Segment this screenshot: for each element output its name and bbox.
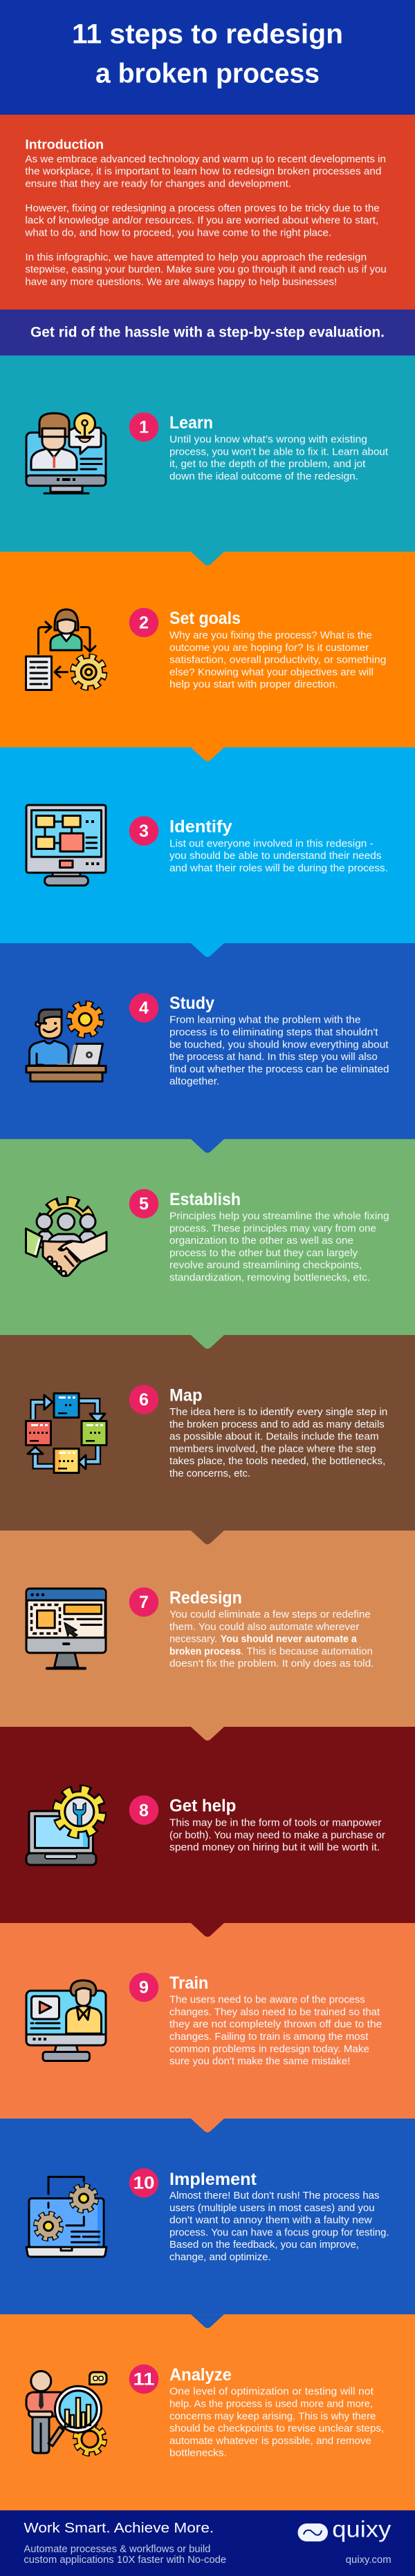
arrow: step 3 to 4: [191, 943, 224, 957]
body text: Set goals: outcome you are hoping for? Is it customer: [169, 642, 369, 654]
icon: person, gear and document cycle: [26, 609, 104, 690]
arrow: step 9 to 10: [191, 2119, 224, 2132]
arrow: step 5 to 6: [191, 1335, 224, 1349]
introduction text: [24, 153, 387, 287]
introduction text: As we embrace advanced technology and warm up to recent developments in: [25, 153, 386, 165]
heading: Redesign: Redesign: [169, 1588, 242, 1607]
number badge 11: 11: [133, 2370, 155, 2389]
number badge 5: [129, 1189, 158, 1218]
panel: step 6 map: [0, 1335, 415, 1531]
panel: step 4 study: [0, 943, 415, 1139]
body text: Study: From learning what the problem with the: [169, 1014, 361, 1026]
number badge 8: 8: [139, 1801, 149, 1820]
body text: Establish: process to the other but they can largely: [169, 1247, 358, 1259]
heading: Set goals: Set goals: [169, 609, 241, 628]
body text: Study: find out whether the process can be eliminated: [169, 1063, 389, 1075]
body text: Train: changes. They also need to be trained so that: [169, 2006, 380, 2018]
body text: Set goals: help you start with proper direction.: [169, 679, 338, 690]
number badge 10: [129, 2168, 158, 2197]
panel: step 3 identify: [0, 748, 415, 943]
panel: step 1 learn: [0, 355, 415, 551]
arrow: step 6 to 7: [191, 1531, 224, 1544]
body text: Get help: This may be in the form of tools or manpower: [169, 1817, 382, 1829]
introduction text: have any more questions. We are always happy to help businesses!: [25, 276, 337, 287]
arrow: step 1 to 2: [191, 551, 224, 565]
body text: Map: as possible about it. Details include the team: [169, 1431, 379, 1443]
number badge 6: [129, 1385, 158, 1414]
body text: Study: process is to eliminating steps that shouldn't: [169, 1027, 378, 1038]
body text: Set goals: satisfaction, overall productivity, or something: [169, 654, 386, 666]
number badge 9: [129, 1973, 158, 2002]
number badge 10: 10: [133, 2174, 155, 2193]
body text: Establish: revolve around streamlining checkpoints,: [169, 1260, 362, 1271]
body text: Redesign: broken process: [169, 1645, 241, 1657]
heading: Map: Map: [169, 1385, 202, 1405]
body text: Set goals: [169, 629, 386, 690]
body text: Analyze: One level of optimization or testing will not: [169, 2386, 374, 2398]
footer description: [24, 2544, 226, 2566]
body text: Analyze: concerns may keep arising. This is why there: [169, 2410, 376, 2422]
icon: cycle of four process cards: [26, 1393, 107, 1473]
body text: Implement: change, and optimize.: [169, 2251, 271, 2263]
icon: laptop with gears and wiring: [26, 2177, 107, 2257]
body text: Map: takes place, the tools needed, the bottlenecks,: [169, 1455, 385, 1467]
banner text: Get rid of the hassle with a step-by-step evaluation.: [30, 323, 385, 340]
icon: person at laptop with gear: [26, 1004, 106, 1081]
panel: title header: [0, 0, 415, 115]
number badge 2: [129, 608, 158, 637]
number badge 11: [129, 2365, 158, 2394]
heading: Identify: Identify: [169, 817, 232, 836]
number badge 4: 4: [139, 998, 149, 1018]
body text: Redesign: You could eliminate a few steps or redefine: [169, 1609, 371, 1620]
body text: Train: sure you don't make the same mistake!: [169, 2056, 350, 2067]
panel: step 8 get help: [0, 1727, 415, 1923]
body text: Analyze: bottlenecks.: [169, 2447, 227, 2459]
body text: Establish: [169, 1211, 389, 1284]
body text: Identify: and what their roles will be during the process.: [169, 862, 388, 874]
body text: Analyze: [169, 2386, 384, 2459]
website: quixy.com: [346, 2555, 391, 2566]
icon: person on monitor with lightbulb: [26, 413, 106, 493]
panel: introduction: [0, 115, 415, 310]
number badge 1: 1: [139, 418, 149, 437]
body text: Establish: process. These principles may vary from one: [169, 1222, 376, 1234]
icon: monitor with design layout and cursor: [26, 1589, 106, 1668]
body text: Train: [169, 1994, 382, 2067]
icon: analyst with magnifier and chart: [26, 2371, 107, 2454]
arrow: step 7 to 8: [191, 1727, 224, 1741]
body text: Set goals: else? Knowing what your objectives are will: [169, 666, 374, 678]
number badge 2: 2: [139, 614, 149, 633]
body text: Implement: [169, 2190, 389, 2263]
introduction text: what to do, and how to proceed, you have come to the right place.: [24, 227, 331, 238]
introduction text: lack of knowledge and/or resources. If you are worried about where to start,: [25, 215, 378, 227]
number badge 3: [129, 816, 158, 846]
heading: Analyze: Analyze: [169, 2365, 232, 2385]
body text: Identify: you should be able to understand their needs: [169, 850, 382, 862]
body text: Learn: Until you know what’s wrong with existing: [169, 434, 367, 445]
body text: Learn: [169, 434, 389, 482]
panel: step 2 set goals: [0, 551, 415, 748]
body text: Get help: spend money on hiring but it will be worth it.: [169, 1841, 380, 1853]
footer description: Automate processes & workflows or build: [24, 2544, 210, 2555]
number badge 7: [129, 1587, 158, 1617]
body text: Train: they are not completely thrown off due to the: [169, 2018, 382, 2030]
body text: Redesign: . This is because automation: [241, 1645, 373, 1657]
body text: Study: [169, 1014, 389, 1088]
body text: Map: [169, 1406, 387, 1479]
introduction text: However, fixing or redesigning a process often proves to be tricky due to the: [25, 202, 380, 214]
panel: step 7 redesign: [0, 1531, 415, 1727]
body text: Implement: Based on the feedback, you can improve,: [169, 2239, 359, 2251]
body text: Study: the process at hand. In this step you will also: [169, 1051, 378, 1063]
body text: Get help: (or both). You may need to make a purchase or: [169, 1829, 385, 1841]
panel: step 10 implement: [0, 2119, 415, 2315]
body text: Redesign: doesn't fix the problem. It only does as told.: [169, 1658, 374, 1669]
introduction text: ensure that they are ready for changes and development.: [25, 178, 291, 189]
panel: step 11 analyze: [0, 2314, 415, 2510]
body text: Get help: [169, 1817, 385, 1853]
heading: Train: Train: [169, 1973, 208, 1993]
icon: laptop with wrench gear: [26, 1789, 102, 1865]
body text: Study: be touched, you should know everything about: [169, 1039, 389, 1050]
body text: Set goals: Why are you fixing the process? What is the: [169, 629, 372, 641]
icon: trainer on monitor with video: [26, 1980, 106, 2061]
body text: Redesign: [169, 1609, 374, 1669]
heading: Establish: Establish: [169, 1190, 241, 1209]
icon: handshake with team and gear: [26, 1202, 107, 1276]
body text: Map: the broken process and to add as many details: [169, 1419, 385, 1430]
heading: Get help: Get help: [169, 1797, 236, 1816]
panel: banner: [0, 310, 415, 356]
body text: Learn: process, you won't be able to fix it. Learn about: [169, 446, 389, 457]
body text: Map: the concerns, etc.: [169, 1468, 250, 1479]
introduction text: In this infographic, we have attempted to help you approach the redesign: [25, 252, 367, 263]
heading: Learn: Learn: [169, 413, 213, 433]
panel: footer: [0, 2510, 415, 2576]
body text: Study: altogether.: [169, 1076, 219, 1088]
body text: Redesign: You should never automate a: [221, 1633, 357, 1645]
icon: flowchart on monitor: [26, 805, 106, 886]
number badge 9: 9: [139, 1978, 149, 1998]
body text: Implement: process. You can have a focus group for testing.: [169, 2226, 389, 2238]
heading: Study: Study: [169, 994, 214, 1013]
body text: Learn: down the ideal outcome of the redesign.: [169, 471, 358, 482]
title: 11 steps to redesign: [72, 19, 343, 49]
introduction heading: Introduction: [25, 138, 104, 153]
number badge 5: 5: [139, 1195, 149, 1214]
body text: Analyze: should be checkpoints to revise unclear steps,: [169, 2423, 384, 2434]
body text: Analyze: help. As the process is used more and more,: [169, 2398, 373, 2410]
body text: Train: The users need to be aware of the process: [169, 1994, 365, 2006]
panel: step 9 train: [0, 1923, 415, 2119]
body text: Train: common problems in redesign today. Make: [169, 2043, 369, 2055]
body text: Establish: standardization, removing bottlenecks, etc.: [169, 1271, 370, 1284]
arrow: step 10 to 11: [191, 2314, 224, 2328]
panel: step 5 establish: [0, 1139, 415, 1335]
title: a broken process: [95, 59, 320, 89]
footer description: custom applications 10X faster with No-code: [24, 2555, 226, 2566]
body text: Establish: organization to the other as well as one: [169, 1235, 353, 1247]
icon: quixy logo mark: [297, 2523, 328, 2541]
logo wordmark: quixy: [332, 2517, 391, 2542]
number badge 1: [129, 413, 158, 442]
body text: Learn: it, get to the depth of the problem, and jot: [169, 458, 366, 470]
body text: Identify: [169, 837, 388, 874]
title: [72, 19, 343, 89]
body text: Redesign: necessary.: [169, 1633, 217, 1645]
body text: Map: members involved, the place where the step: [169, 1443, 376, 1455]
arrow: step 4 to 5: [191, 1139, 224, 1153]
body text: Establish: Principles help you streamline the whole fixing: [169, 1211, 389, 1222]
body text: Map: The idea here is to identify every single step in: [169, 1406, 387, 1418]
body text: Implement: users (multiple users in most cases) and you: [169, 2202, 375, 2214]
arrow: step 8 to 9: [191, 1923, 224, 1937]
number badge 7: 7: [139, 1593, 149, 1612]
body text: Redesign: them. You could also automate wherever: [169, 1621, 359, 1633]
body text: Implement: Almost there! But don't rush! The process has: [169, 2190, 379, 2201]
introduction text: stepwise, easing your burden. Make sure you go through it and reach us if you: [25, 264, 387, 276]
body text: Train: changes. Failing to train is among the most: [169, 2031, 369, 2043]
body text: Analyze: automate whatever is possible, and remove: [169, 2435, 371, 2447]
footer tagline: Work Smart. Achieve More.: [24, 2521, 214, 2536]
arrow: step 2 to 3: [191, 748, 224, 761]
body text: Implement: don't want to annoy them with a faulty new: [169, 2215, 372, 2226]
heading: Implement: Implement: [169, 2170, 257, 2189]
number badge 6: 6: [139, 1390, 149, 1410]
number badge 4: [129, 993, 158, 1023]
body text: Identify: List out everyone involved in this redesign -: [169, 837, 374, 849]
introduction text: the workplace, it is important to learn how to redesign broken processes and: [25, 166, 381, 178]
number badge 3: 3: [139, 822, 149, 841]
number badge 8: [129, 1795, 158, 1825]
